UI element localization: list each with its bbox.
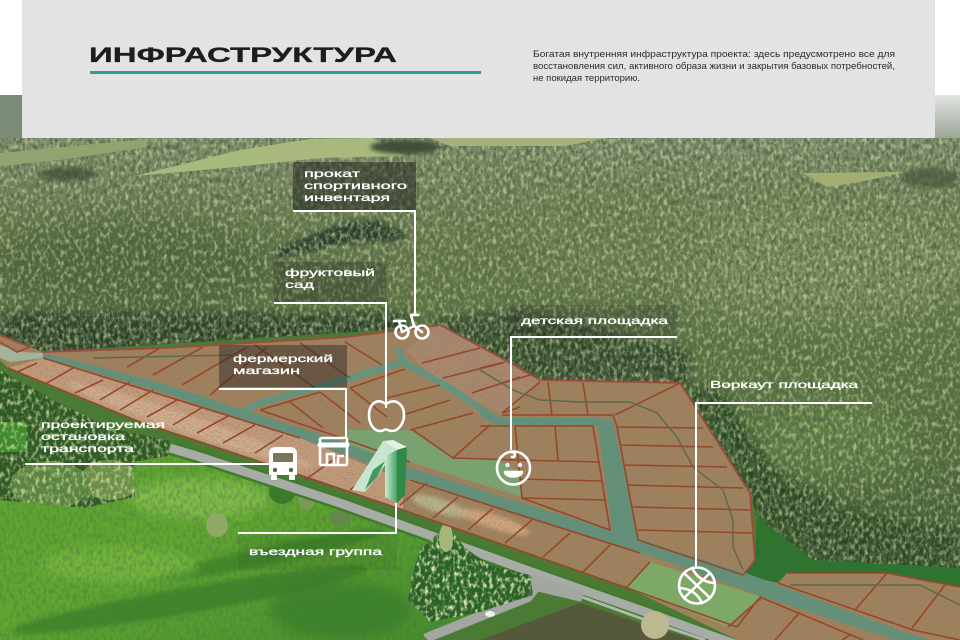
description: Богатая внутренняя инфраструктура проекта: здесь предусмотрено все для: [533, 49, 895, 59]
callout: фруктовый сад: сад: [285, 280, 314, 291]
callout: въездная группа: въездная группа: [249, 547, 383, 558]
callout: прокат спортивного инвентаря: прокат: [304, 169, 361, 180]
callout: фермерский магазин: фермерский: [233, 353, 333, 365]
callout: детская площадка: детская площадка: [521, 316, 669, 327]
plots base: [0, 325, 960, 640]
callout: фруктовый сад: фруктовый: [285, 267, 375, 279]
description: восстановления сил, активного образа жизни и закрытия базовых потребностей,: [533, 61, 895, 71]
description: [533, 49, 895, 83]
icon: bicycle: [394, 315, 428, 338]
land plots map: [0, 325, 960, 640]
lower plot patch: [480, 603, 695, 640]
callout: проектируемая остановка транспорта: остановка: [41, 432, 126, 443]
icon: smiling child: [497, 452, 530, 484]
callout: прокат спортивного инвентаря: инвентаря: [304, 193, 390, 204]
tree island: [408, 532, 533, 622]
callout: проектируемая остановка транспорта: транспорта: [41, 444, 135, 455]
icon: shop: [320, 438, 347, 465]
callout: проектируемая остановка транспорта: [25, 420, 270, 464]
callout: фермерский магазин: магазин: [233, 366, 300, 377]
logo: entrance sign: [352, 440, 407, 503]
clearings: [0, 139, 147, 166]
callout: фруктовый сад: [274, 262, 386, 408]
callout: детская площадка: [510, 305, 677, 450]
callout: прокат спортивного инвентаря: [293, 162, 416, 315]
callout: въездная группа: [238, 503, 397, 570]
callout: воркаут площадка: Воркаут площадка: [710, 380, 859, 391]
meadow by the forest edge: [743, 517, 960, 590]
callout: проектируемая остановка транспорта: проектируемая: [41, 420, 165, 431]
title: ИНФРАСТРУКТУРА: [89, 44, 397, 67]
callout: фермерский магазин: [219, 345, 347, 437]
title underline: [90, 71, 481, 74]
outer plot boundaries: [0, 325, 755, 575]
plot divider lines: [8, 342, 960, 640]
grass field: [0, 445, 494, 640]
contour track: [93, 355, 960, 605]
lawns: [340, 430, 522, 497]
description: не покидая территорию.: [533, 73, 640, 83]
callout: прокат спортивного инвентаря: спортивного: [304, 181, 408, 192]
forest: [0, 138, 960, 568]
tree belt: [0, 370, 172, 510]
icon: apple: [369, 401, 404, 431]
roadside trees: [269, 480, 295, 504]
green roads: [43, 353, 930, 640]
road: [170, 448, 740, 640]
distant haze: [0, 95, 22, 138]
icon: basketball: [679, 568, 715, 604]
callout: воркаут площадка: [696, 380, 872, 567]
icon: bus: [269, 447, 297, 480]
header panel: [22, 0, 935, 138]
